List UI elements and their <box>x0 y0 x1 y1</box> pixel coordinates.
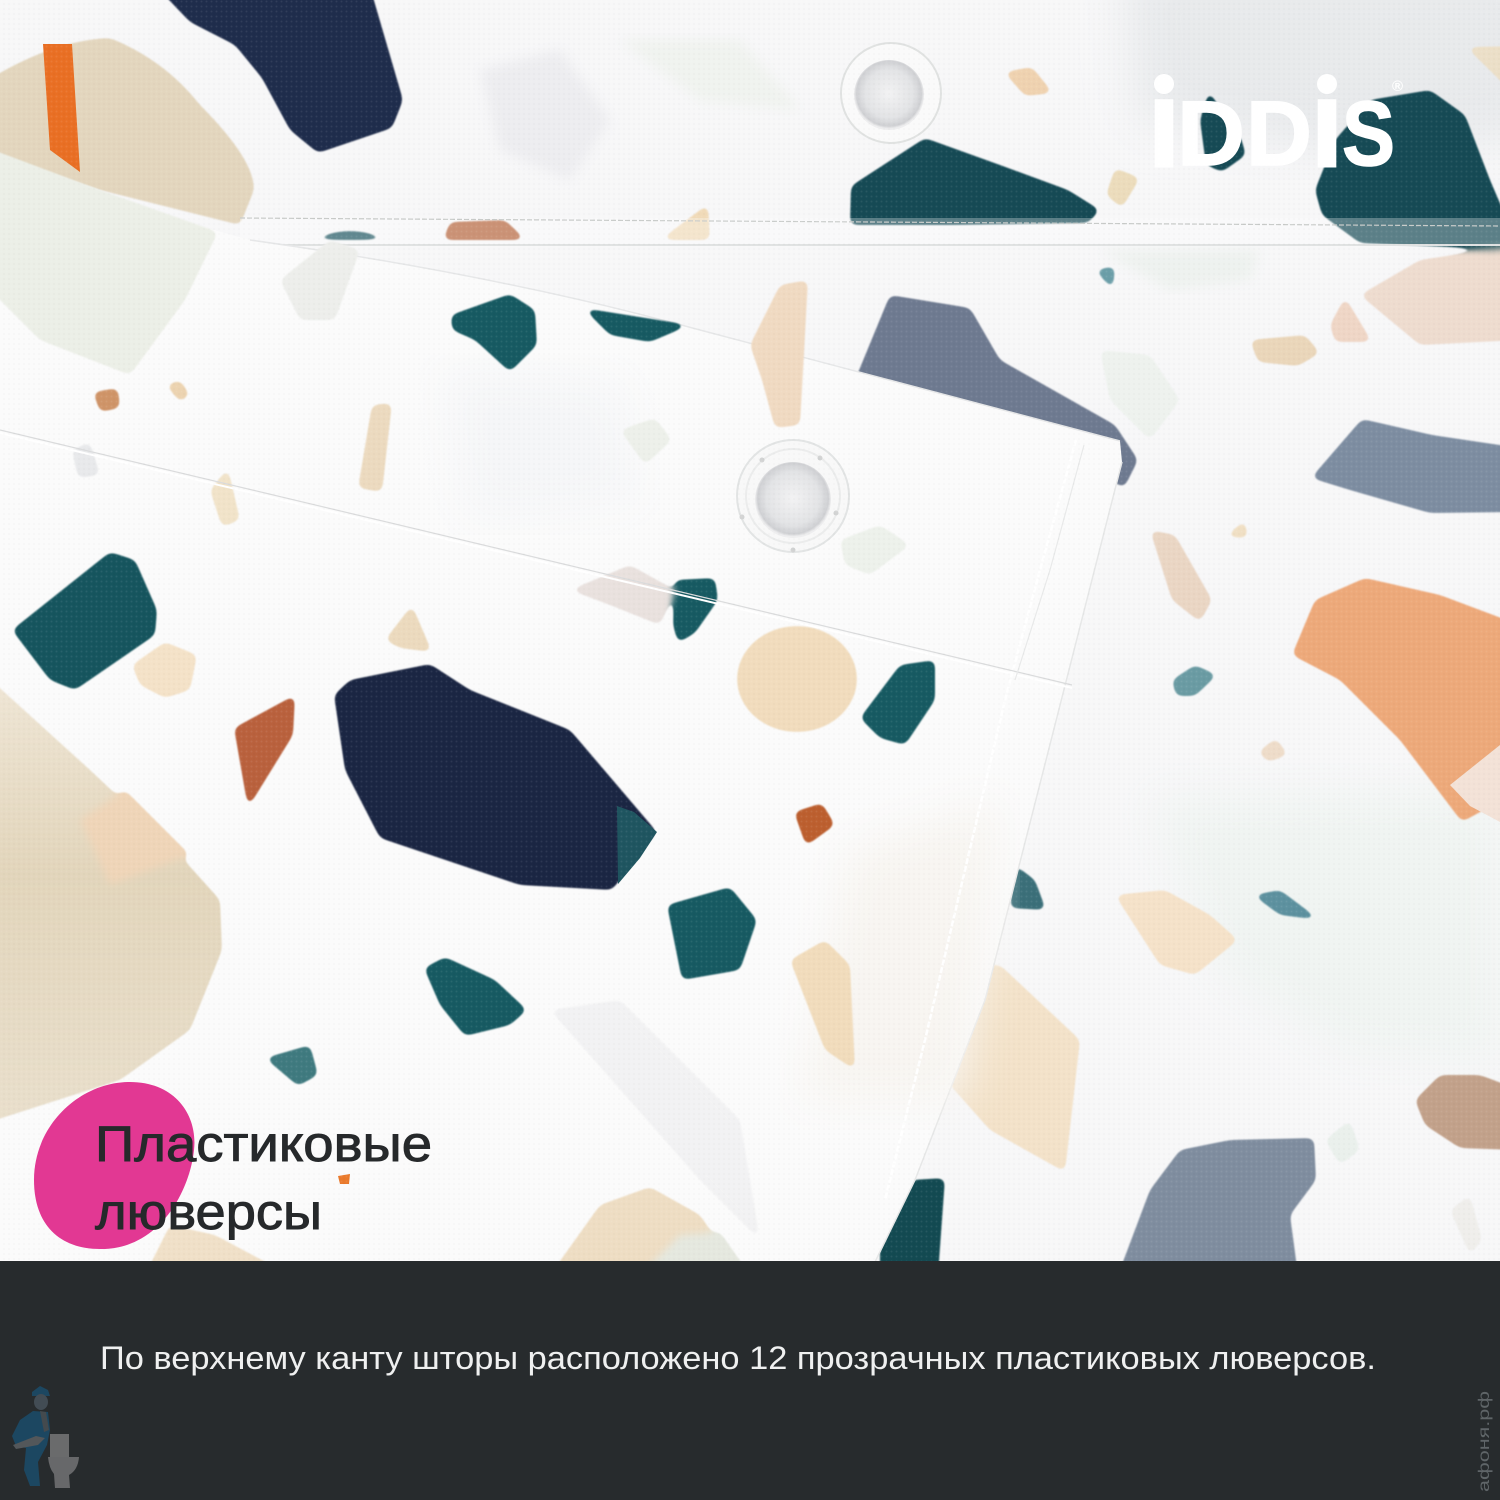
flap: lower hem stitch <box>0 430 1072 685</box>
terrazzo: blue-grey shape right <box>1311 419 1500 513</box>
terrazzo: rose shapes right <box>1360 245 1500 345</box>
terrazzo: brown chip right <box>1415 1075 1500 1150</box>
flap: cream circle <box>132 642 197 698</box>
photo: front curtain flap <box>0 145 1122 1275</box>
flap: teal overlap on navy blob <box>617 806 657 884</box>
terrazzo: teal chip at hem bottom <box>880 1178 945 1275</box>
badge: pink blob <box>34 1082 194 1249</box>
terrazzo: orange blob right <box>1292 578 1500 822</box>
flap: vertical stitch <box>885 440 1076 1200</box>
terrazzo: teal upper center <box>850 138 1100 225</box>
flap: teal sliver <box>583 308 690 342</box>
terrazzo: small chips top <box>1004 67 1053 96</box>
footer panel <box>0 1261 1500 1500</box>
terrazzo: teal behind logo <box>1200 90 1246 172</box>
flap: large beige blob lower left <box>0 670 222 1125</box>
caption text: По верхнему канту шторы расположено 12 прозрачных пластиковых люверсов. <box>100 1340 1376 1376</box>
terrazzo: teal top right <box>1315 90 1500 250</box>
flap: rust chip <box>234 695 295 808</box>
terrazzo: pale right chips <box>1150 530 1212 622</box>
flap: tiny orange chip <box>338 1174 350 1184</box>
terrazzo: small teal and beige chips right <box>1172 665 1217 696</box>
logo: IDDIS: ® <box>1392 78 1403 95</box>
flap: teal blob left <box>12 552 157 690</box>
flap: bottom beige shape <box>550 1187 740 1275</box>
logo: IDDIS: D <box>1246 83 1312 185</box>
flap: chips centre <box>385 605 432 652</box>
terrazzo: beige wedge behind hem <box>950 965 1080 1172</box>
terrazzo: blue-grey under corner <box>855 295 1138 488</box>
terrazzo: blue-grey blob lower right <box>1118 1138 1316 1275</box>
terrazzo: beige blob top left <box>0 38 254 225</box>
terrazzo: orange stripe <box>43 44 80 172</box>
flap: pale sage wash left <box>0 145 218 375</box>
flap: small brown chips <box>93 388 120 412</box>
logo: IDDIS: D <box>1177 83 1245 185</box>
icon: plumber with toilet watermark <box>12 1386 79 1488</box>
flap: rust small chip <box>794 803 835 846</box>
flap: pale streak <box>550 1000 760 1240</box>
terrazzo: pale patch on orange blob <box>1450 745 1500 822</box>
terrazzo: navy top blob <box>150 0 403 153</box>
heading: Пластиковые люверсы: Пластиковые <box>95 1116 432 1172</box>
flap: navy large blob <box>334 664 657 890</box>
logo: IDDIS: I <box>1314 83 1340 185</box>
flap: teal chip next to circle <box>860 660 935 745</box>
flap: teal chips lower <box>667 887 757 980</box>
eyelet: lower grommet <box>737 440 849 552</box>
flap: tan stick chip <box>358 403 392 492</box>
flap: cream round chip <box>737 626 857 732</box>
watermark: афоня.рф: афоня.рф <box>1476 1391 1493 1492</box>
flap: peach chip lower <box>790 940 855 1070</box>
heading: Пластиковые люверсы <box>95 1116 432 1240</box>
eyelet: upper grommet <box>841 43 941 143</box>
logo: IDDIS: I <box>1151 83 1177 185</box>
logo: IDDIS: S <box>1342 83 1395 185</box>
heading: Пластиковые люверсы: люверсы <box>95 1184 322 1240</box>
flap: faint chip <box>280 240 360 320</box>
terrazzo pieces on the front flap <box>0 145 935 1275</box>
flap: teal blob <box>451 294 537 372</box>
top hem band <box>240 218 1500 246</box>
logo: IDDIS <box>1151 74 1403 185</box>
flap: peach tall chip <box>750 280 808 428</box>
